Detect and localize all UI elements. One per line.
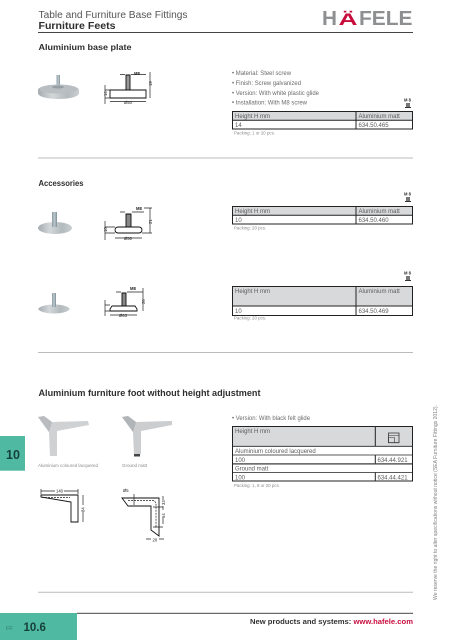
technical drawing: foot side B: 33 — [161, 500, 166, 505]
technical drawing: foot 63 — [105, 286, 146, 318]
table: foot 63: Aluminium matt — [358, 289, 400, 295]
table: foot 50: 634.50.460 — [358, 218, 389, 224]
table: foot 50 — [232, 206, 412, 224]
bullet list: specifications: • Installation: With M8 screw — [232, 100, 308, 106]
table: base plate — [232, 112, 412, 129]
chapter tab: 10 — [0, 436, 25, 471]
bullet list: specifications: • Version: With white plastic glide — [232, 91, 320, 97]
icon: M8 screw: M 8 — [404, 270, 412, 276]
table: foot 50: 10 — [235, 218, 242, 224]
photo: ground matt foot — [122, 416, 172, 456]
page number tab: 10.6 — [24, 622, 46, 634]
technical drawing: foot side B: 64 — [161, 513, 166, 518]
technical drawing: base plate: 19 — [148, 81, 153, 86]
icon: M8 screw: M 8 — [404, 192, 412, 196]
table: base plate: Height H mm — [235, 114, 270, 120]
photo: foot M8 50 — [38, 212, 72, 234]
page title: Furniture Feets — [38, 21, 116, 32]
technical drawing: foot side B — [122, 488, 166, 542]
table: furniture foot — [232, 426, 412, 481]
bullet list: specifications: • Finish: Screw galvanized — [232, 81, 301, 87]
table: base plate: Aluminium matt — [358, 114, 400, 120]
table: foot 63: Height H mm — [235, 289, 270, 295]
icon: square profile — [388, 433, 399, 443]
photo: lacquered foot — [38, 416, 89, 456]
table: furniture foot: Aluminium coloured lacquered — [235, 449, 316, 455]
table: base plate: 14 — [235, 123, 242, 129]
technical drawing: foot 63: 26 — [141, 299, 146, 304]
packing note: Packing: 20 pcs. — [234, 226, 266, 230]
technical drawing: base plate: M8 — [134, 71, 140, 76]
technical drawing: foot side A — [41, 488, 86, 522]
bullet: version: • Version: With black felt glide — [232, 416, 311, 422]
section: aluminium base plate — [38, 43, 412, 136]
icon: M8 screw — [404, 192, 412, 202]
legal note, vertical: We reserve the right to alter specifications without notice (SEA Furniture Fittings 2012). — [433, 405, 439, 600]
section: accessories — [38, 179, 412, 320]
table: foot 63 — [232, 286, 412, 316]
packing note: Packing: 20 pcs. — [234, 316, 266, 320]
table: base plate: 634.50.465 — [358, 123, 389, 129]
table: furniture foot: Height H mm — [235, 429, 270, 435]
page number tab: FF — [6, 626, 13, 632]
logo: Hafele: H — [322, 7, 337, 30]
heading: aluminium base plate: Aluminium base plate — [38, 43, 132, 52]
section: furniture foot — [38, 388, 412, 542]
technical drawing: foot 63: M8 — [130, 286, 136, 291]
logo: Hafele: Ä — [338, 11, 358, 29]
table: furniture foot: 100 — [235, 458, 246, 464]
bullet list: specifications — [232, 71, 320, 106]
technical drawing: base plate: Ø50 — [124, 100, 133, 105]
logo: Hafele: FELE — [359, 7, 412, 30]
technical drawing: foot 50 — [103, 206, 153, 241]
technical drawing: foot 50: M8 — [136, 206, 142, 211]
technical drawing: base plate: 14 — [103, 91, 108, 96]
icon: M8 screw — [404, 98, 412, 108]
technical drawing: foot 50: 10 — [103, 227, 108, 232]
table: furniture foot: 634.44.921 — [378, 458, 408, 464]
technical drawing: base plate — [103, 71, 153, 105]
heading: accessories: Accessories — [38, 179, 84, 188]
technical drawing: foot side B: Ø5 — [123, 488, 129, 493]
chapter tab: 10: 10 — [6, 448, 20, 462]
packing note: Packing: 1, 8 or 20 pcs. — [234, 483, 280, 488]
table: foot 63: 10 — [235, 309, 242, 315]
technical drawing: foot side A: 140 — [56, 488, 64, 494]
technical drawing: foot side B: 20 — [152, 538, 158, 542]
icon: M8 screw — [404, 270, 412, 281]
page number tab — [0, 613, 77, 640]
table: furniture foot: 100 — [235, 475, 246, 481]
heading: furniture foot: Aluminium furniture foot without height adjustment — [38, 388, 261, 398]
caption: lacquered: Aluminium coloured lacquered — [38, 463, 99, 468]
table: foot 50: Aluminium matt — [358, 209, 400, 215]
technical drawing: foot side A: 84 — [80, 507, 86, 512]
page title: Table and Furniture Base Fittings — [38, 10, 188, 21]
packing note: Packing: 1 or 20 pcs. — [234, 130, 275, 136]
footer text: New products and systems: www.hafele.com — [250, 617, 413, 626]
technical drawing: foot 50: Ø50 — [124, 236, 133, 241]
technical drawing: foot 63: Ø63 — [119, 313, 128, 318]
bullet list: specifications: • Material: Steel screw — [232, 71, 292, 77]
table: furniture foot: Ground matt — [235, 466, 269, 472]
caption: ground matt: Ground matt — [122, 463, 148, 468]
technical drawing: foot 50: 21 — [148, 219, 153, 224]
photo: base plate foot — [38, 75, 79, 99]
page title — [38, 10, 188, 32]
photo: foot M8 63 — [38, 293, 70, 314]
icon: M8 screw: M 8 — [404, 98, 412, 102]
table: foot 63: 634.50.469 — [358, 309, 389, 315]
table: foot 50: Height H mm — [235, 209, 270, 215]
table: furniture foot: 634.44.421 — [378, 475, 408, 481]
logo: Hafele — [322, 7, 412, 30]
